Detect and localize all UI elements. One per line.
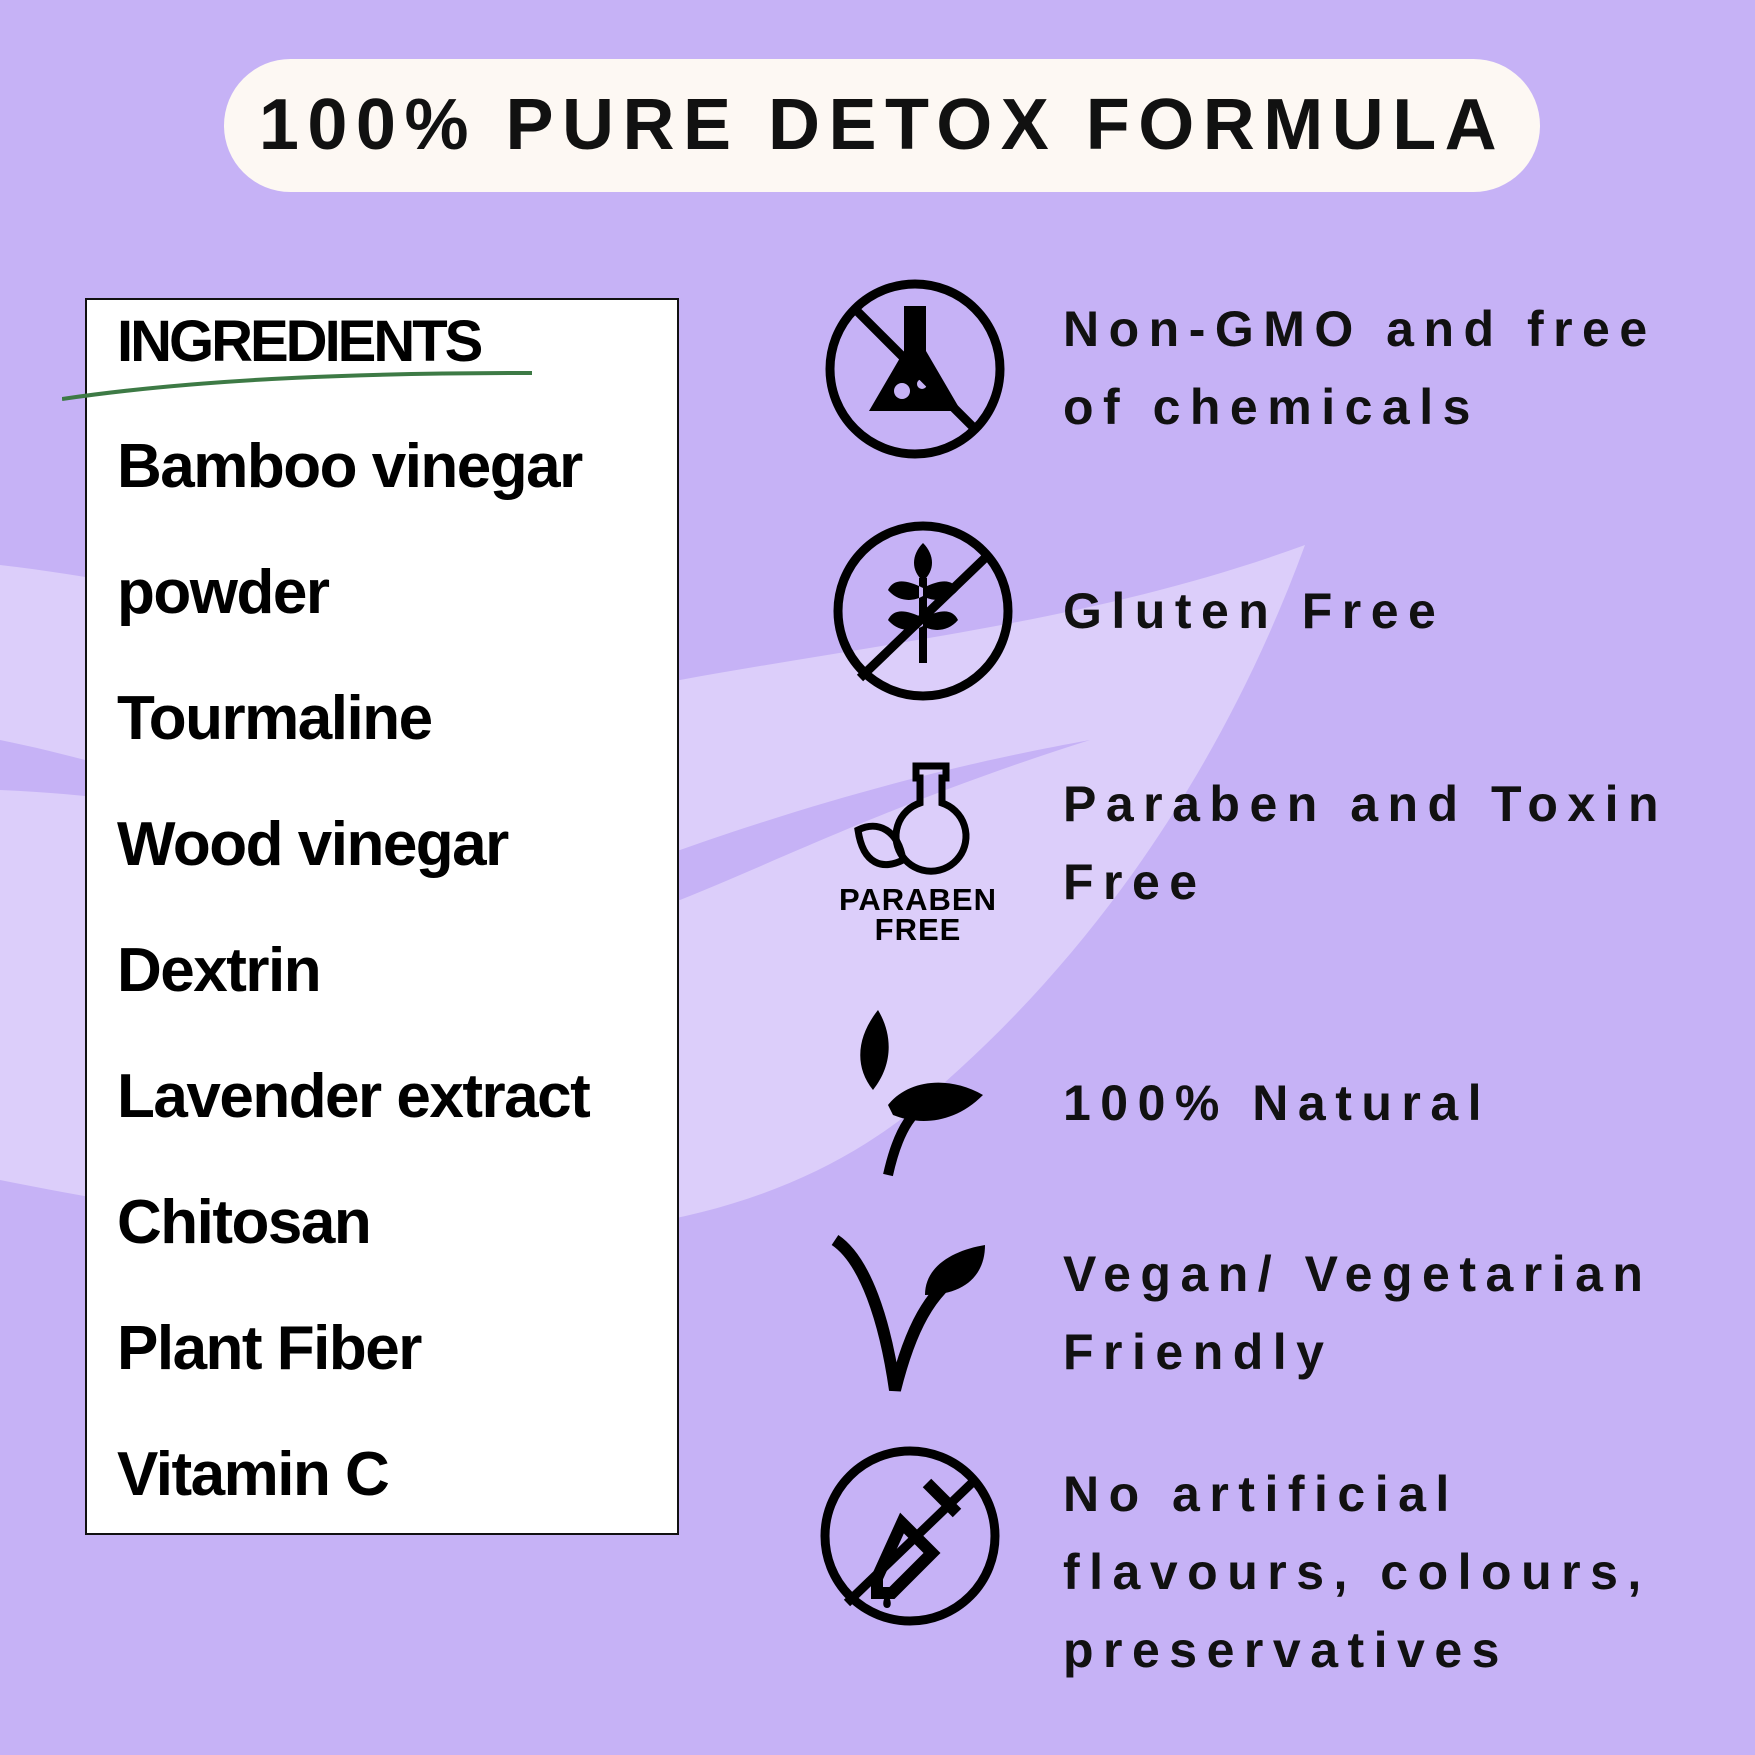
text: no artificial xyxy=(1063,1466,1651,1678)
text: non-gmo: of chemicals xyxy=(1063,379,1480,435)
text: non-gmo xyxy=(1063,301,1657,435)
ingredient list: Wood vinegar xyxy=(117,810,508,879)
icon: no artificial xyxy=(820,1446,1000,1626)
title xyxy=(224,59,1540,192)
ingredient list: Chitosan xyxy=(117,1188,370,1257)
ingredient list: Vitamin C xyxy=(117,1440,388,1509)
text: paraben: Free xyxy=(1063,854,1207,910)
ingredient list: Tourmaline xyxy=(117,684,432,753)
ingredient list: powder xyxy=(117,558,328,627)
icon: paraben free xyxy=(839,762,997,947)
title: 100% PURE DETOX FORMULA xyxy=(259,85,1505,165)
text: vegan: Friendly xyxy=(1063,1324,1333,1380)
text: gluten free: Gluten Free xyxy=(1063,583,1445,639)
icon: no chemicals xyxy=(826,280,1004,458)
text: vegan: Vegan/ Vegetarian xyxy=(1063,1246,1652,1302)
icon: paraben free: PARABEN xyxy=(839,882,997,917)
icon: paraben free: FREE xyxy=(875,912,961,947)
text: no artificial: flavours, colours, xyxy=(1063,1544,1651,1600)
text: no artificial: preservatives xyxy=(1063,1622,1509,1678)
icon: leaves xyxy=(860,1010,983,1176)
ingredient list: Lavender extract xyxy=(117,1062,589,1131)
ingredient list: Bamboo vinegar xyxy=(117,432,582,501)
ingredient list: Plant Fiber xyxy=(117,1314,421,1383)
text: no artificial: No artificial xyxy=(1063,1466,1459,1522)
text: vegan xyxy=(1063,1246,1652,1380)
icon: gluten free xyxy=(834,522,1012,700)
heading: ingredients: INGREDIENTS xyxy=(117,309,480,374)
panel: ingredients xyxy=(85,298,679,1535)
text: paraben: Paraben and Toxin xyxy=(1063,776,1668,832)
ingredient list: Dextrin xyxy=(117,936,320,1005)
icon: vegan xyxy=(832,1235,985,1392)
text: natural: 100% Natural xyxy=(1063,1075,1491,1131)
ingredient list xyxy=(117,432,590,1509)
text: non-gmo: Non-GMO and free xyxy=(1063,301,1657,357)
text: paraben xyxy=(1063,776,1668,910)
